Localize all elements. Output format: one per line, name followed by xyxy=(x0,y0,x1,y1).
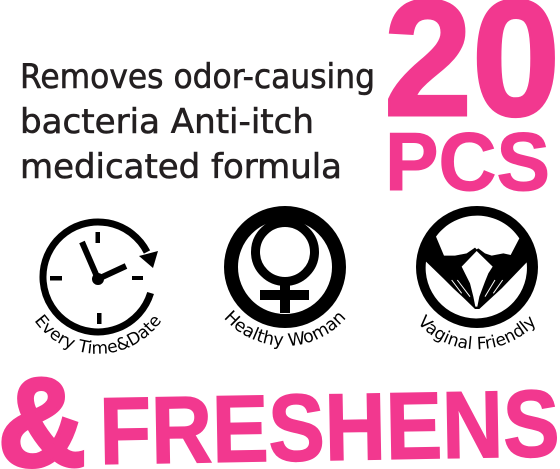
icon: hands in ring xyxy=(416,206,538,328)
icon: clock with circular arrow xyxy=(43,222,158,332)
icon: female symbol in ring xyxy=(231,213,339,321)
text block: product benefits xyxy=(20,57,375,187)
text block: product benefits: Removes odor-causing xyxy=(20,57,375,97)
label: Every Time&Date: Every Time&Date xyxy=(35,314,161,354)
label: Healthy Woman: Healthy Woman xyxy=(224,310,346,349)
label: Vaginal Friendly: Vaginal Friendly xyxy=(420,314,535,350)
text block: product benefits: bacteria Anti-itch xyxy=(20,102,314,142)
heading: & FRESHENS xyxy=(0,352,560,469)
heading: 20 PCS: PCS xyxy=(385,115,550,208)
text block: product benefits: medicated formula xyxy=(20,147,342,187)
